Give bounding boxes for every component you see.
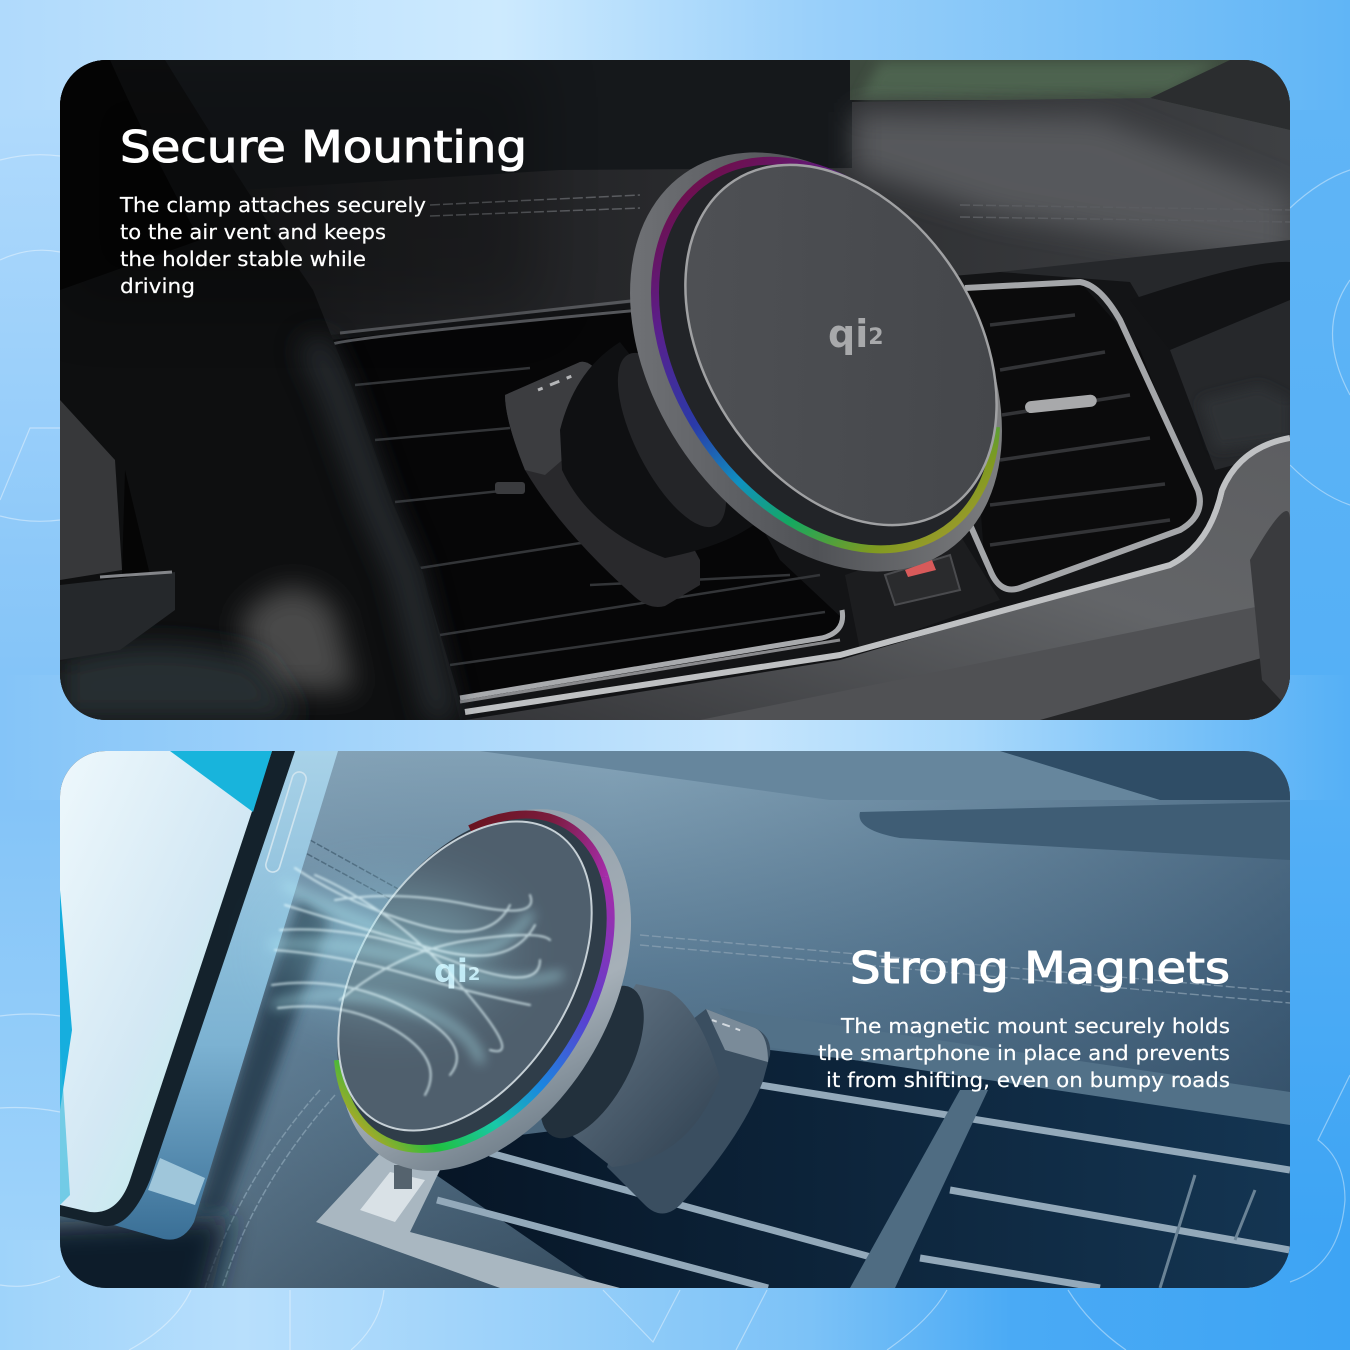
qi2 logo: 2: [868, 325, 884, 350]
panel: strong magnets: [60, 751, 1290, 1288]
magnetic disc: [630, 152, 1002, 572]
lower dashboard trim: [460, 438, 1290, 720]
right air vent: [965, 282, 1200, 590]
description: the holder stable while: [120, 247, 366, 271]
description: The clamp attaches securely: [119, 193, 426, 217]
description: it from shifting, even on bumpy roads: [826, 1068, 1230, 1092]
mount arm: [542, 984, 711, 1164]
description: the smartphone in place and prevents: [818, 1041, 1230, 1065]
mount arm: [560, 338, 760, 558]
heading: Strong Magnets: [850, 943, 1230, 994]
air vent: [316, 1040, 1290, 1288]
description: to the air vent and keeps: [120, 220, 386, 244]
qi2 logo: 2: [468, 964, 480, 985]
centre switches: [845, 535, 1000, 650]
text overlay shade: [430, 175, 548, 318]
panel: secure mounting: [60, 60, 1290, 720]
qi2 logo: qi: [434, 952, 468, 990]
magnetic disc: [334, 809, 631, 1171]
car interior backdrop: [60, 60, 1290, 720]
magnetic field lines: [272, 868, 560, 1095]
qi2 logo: qi: [828, 312, 868, 356]
dashboard backdrop: [60, 751, 1290, 1288]
mount clamp plate: [505, 362, 700, 607]
left air vent: [330, 300, 844, 700]
heading: Secure Mounting: [120, 122, 527, 173]
mount clamp plate: [607, 1009, 770, 1214]
steering wheel: [60, 60, 460, 720]
description: [818, 1014, 1230, 1092]
description: driving: [120, 274, 195, 298]
description: The magnetic mount securely holds: [840, 1014, 1230, 1038]
description: [119, 193, 426, 298]
phone: [60, 751, 338, 1240]
